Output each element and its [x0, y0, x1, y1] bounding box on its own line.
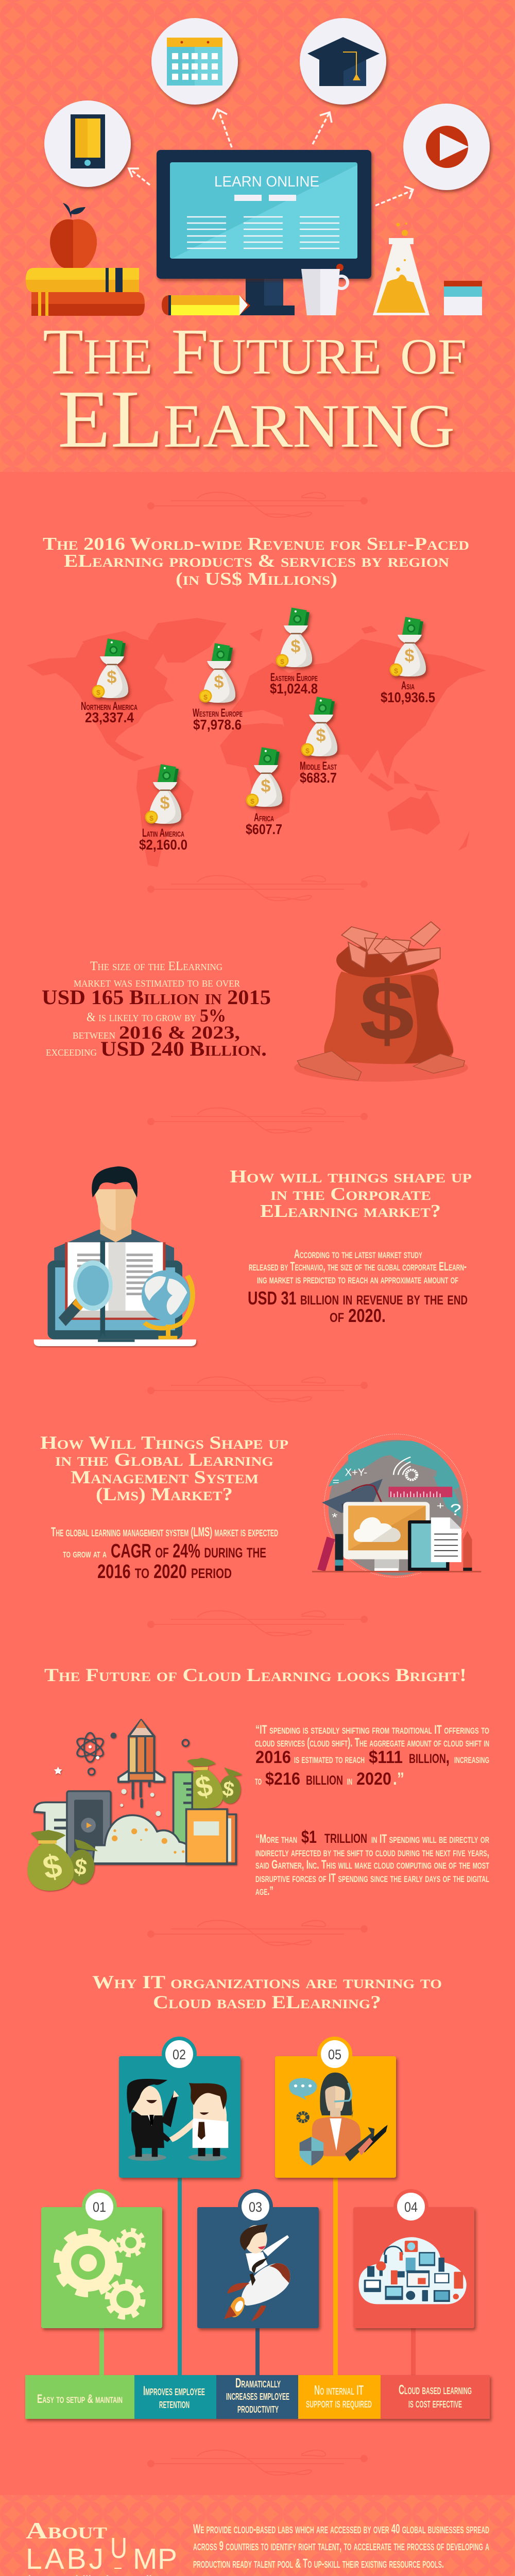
benefit 2 — [134, 2375, 216, 2419]
region: Middle East: $ — [305, 747, 310, 755]
quote: cloud shift: to — [255, 1774, 262, 1788]
benefit 5: is cost effective — [408, 2396, 462, 2411]
body text: 2016 to 2020 period — [97, 1561, 232, 1583]
logo: labjump: MP — [133, 2543, 177, 2575]
money bags left — [68, 1850, 94, 1884]
region: Africa: $ — [261, 776, 271, 796]
market size text: exceeding — [46, 1045, 97, 1059]
heading: ELearning market? — [260, 1201, 441, 1221]
quote: one trillion: $1 — [301, 1827, 317, 1847]
region: Eastern Europe: Eastern Europe — [270, 671, 318, 684]
quote: cloud shift: $111 — [369, 1748, 403, 1767]
benefit 4: No internal IT — [314, 2382, 364, 2398]
heading: in the Global Learning — [55, 1449, 273, 1470]
pencil rocket — [118, 1720, 164, 1782]
region: Middle East: Middle East — [300, 759, 337, 772]
book — [227, 1815, 236, 1864]
region: Africa: $ — [250, 797, 254, 805]
body text: to grow at a — [63, 1547, 107, 1560]
quote: one trillion — [255, 1826, 489, 1898]
math symbols: = — [332, 1477, 339, 1487]
learning devices illustration — [312, 1434, 481, 1577]
small box — [444, 281, 482, 315]
money bags right — [219, 1775, 241, 1804]
money sack illustration — [294, 922, 468, 1082]
region: Northern America: $ — [96, 688, 100, 697]
region: Latin America: $2,160.0 — [139, 837, 187, 853]
heading — [92, 1972, 442, 2012]
cloud learning illustration: $ — [72, 1854, 89, 1880]
benefit 3: productivity — [237, 2401, 279, 2416]
card 03: rocket man — [197, 2189, 319, 2328]
card 05: support — [275, 2037, 396, 2178]
money sack illustration: $ — [359, 964, 415, 1058]
quote: cloud shift: is estimated to reach — [294, 1752, 365, 1766]
icon: calendar in circle — [151, 18, 238, 105]
ruler — [174, 1772, 192, 1863]
benefit 4: support is required — [306, 2396, 372, 2411]
icon: graduation cap in circle — [300, 18, 386, 105]
title: The Future of — [43, 309, 467, 389]
region: Africa: $607.7 — [246, 821, 282, 837]
quote: one trillion: trillion — [324, 1826, 367, 1847]
math symbols: * — [332, 1511, 338, 1524]
region: Eastern Europe: $ — [291, 637, 301, 656]
cloud learning illustration: $ — [193, 1769, 215, 1804]
region: Latin America: $ — [149, 814, 153, 822]
market size text: market was estimated to be over — [74, 976, 240, 990]
quote: cloud shift: in — [347, 1774, 352, 1788]
benefit 2: retention — [159, 2397, 190, 2411]
card 02: teamwork — [119, 2037, 241, 2178]
heading — [43, 534, 469, 589]
region: Western Europe: $7,978.6 — [193, 717, 242, 733]
market size text: USD 240 Billion. — [100, 1037, 267, 1060]
heading: ELearning products & services by region — [64, 551, 449, 571]
footer — [0, 2495, 515, 2576]
heading: Why IT organizations are turning to — [92, 1972, 442, 1992]
market size text: USD 165 Billion in 2015 — [42, 986, 271, 1009]
title: ELearning — [58, 368, 455, 466]
pencil — [162, 295, 250, 315]
heading: (Lms) Market? — [96, 1484, 233, 1504]
about heading: About — [26, 2517, 107, 2544]
mug — [301, 264, 348, 315]
logo: labjump: LABJ — [26, 2543, 104, 2575]
market size text: 5% — [200, 1005, 226, 1026]
region: Asia: $10,936.5 — [381, 689, 435, 705]
flask — [373, 223, 430, 315]
heading: How will things shape up — [230, 1166, 472, 1187]
market size text: The size of the ELearning — [90, 959, 222, 973]
rocket man illustration — [224, 2224, 290, 2321]
heading: in the Corporate — [270, 1184, 431, 1204]
region: Northern America: Northern America — [81, 700, 138, 713]
math symbols: + — [437, 1500, 444, 1512]
cloud device icon — [359, 2237, 467, 2304]
section: why cloud based elearning — [25, 1972, 490, 2419]
region: Middle East: $ — [316, 726, 326, 745]
region: Africa: Africa — [254, 811, 274, 824]
monitor — [157, 150, 371, 315]
icon: play button in circle — [403, 104, 490, 190]
quote: one trillion: “More than — [255, 1832, 297, 1846]
heading — [40, 1432, 288, 1504]
heading: Cloud based ELearning? — [153, 1992, 381, 2012]
body text — [248, 1247, 468, 1326]
benefit 2: Improves employee — [143, 2384, 205, 2398]
region: Africa — [246, 747, 282, 837]
quote: cloud shift: $216 — [265, 1769, 300, 1789]
card 01: gears: 01 — [93, 2199, 106, 2215]
region: Middle East: $683.7 — [300, 770, 337, 786]
books and apple — [26, 203, 145, 316]
benefit 5 — [381, 2375, 490, 2419]
region: Eastern Europe — [270, 607, 318, 697]
heading: The 2016 World-wide Revenue for Self-Paced — [43, 534, 469, 554]
region: Western Europe: $ — [203, 693, 208, 701]
market size text — [42, 959, 271, 1060]
region: Asia: Asia — [401, 679, 415, 692]
benefit 1 — [25, 2375, 134, 2419]
section: market size — [42, 922, 468, 1082]
card 03: rocket man: 03 — [249, 2199, 262, 2215]
heading: Management System — [71, 1467, 259, 1487]
reader illustration — [34, 1166, 196, 1346]
about text — [193, 2522, 489, 2576]
card 01: gears — [41, 2189, 162, 2328]
heading: The Future of Cloud Learning looks Bright! — [44, 1665, 467, 1685]
region: Northern America: $ — [107, 668, 117, 687]
header pattern panel — [0, 0, 515, 472]
quote: cloud shift: billion — [306, 1768, 343, 1789]
card 05: support: 05 — [328, 2047, 341, 2062]
header banner — [0, 0, 515, 472]
tablet — [67, 1791, 111, 1863]
label: learn online: LEARN ONLINE — [214, 174, 319, 190]
scroll — [35, 1802, 67, 1863]
title — [43, 309, 467, 466]
logo: labjump — [26, 2532, 177, 2576]
quote: cloud shift: billion, — [409, 1746, 450, 1767]
cloud learning illustration: $ — [40, 1848, 65, 1887]
people shaking hands — [127, 2079, 228, 2161]
bottom benefits bar — [25, 2375, 490, 2419]
quote: cloud shift: 2016 — [255, 1748, 291, 1767]
heading: (in US$ Millions) — [176, 569, 337, 589]
benefit 3 — [216, 2375, 298, 2419]
quote: cloud shift: increasing — [454, 1752, 489, 1766]
heading: How Will Things Shape up — [40, 1432, 288, 1453]
region: Eastern Europe: $ — [280, 657, 284, 666]
section: LMS market — [40, 1432, 481, 1583]
quote: cloud shift: 2020 — [356, 1769, 391, 1789]
section: cloud learning — [27, 1665, 489, 1898]
body text: of 2020. — [330, 1305, 386, 1326]
quote: cloud shift: .” — [393, 1769, 404, 1789]
arrows from monitor — [129, 109, 413, 206]
cloud learning illustration: $ — [221, 1777, 236, 1802]
market size text: & is likely to grow by — [87, 1010, 196, 1024]
footer pattern panel — [0, 2495, 515, 2576]
benefit 3: Dramatically — [235, 2375, 281, 2391]
math symbols: ? — [450, 1501, 461, 1519]
cloud — [93, 1815, 206, 1863]
body text: The global learning management system (LMS) market is expected — [51, 1525, 278, 1539]
card 04: cloud of devices: 04 — [404, 2199, 418, 2215]
section: corporate elearning market — [34, 1166, 472, 1346]
card 02: teamwork: 02 — [173, 2047, 186, 2062]
benefit 1: Easy to setup & maintain — [37, 2392, 123, 2406]
icon: phone in circle — [44, 100, 131, 187]
connector lines — [99, 2174, 416, 2375]
math symbols — [332, 1466, 461, 1524]
region: Asia: $ — [405, 646, 415, 666]
support woman — [289, 2073, 388, 2166]
region: Latin America — [139, 764, 187, 853]
body text: CAGR of 24% during the — [111, 1540, 266, 1562]
math symbols: X+Y- — [345, 1466, 367, 1478]
region: Latin America: Latin America — [142, 826, 184, 839]
region: Asia: $ — [394, 667, 398, 675]
quote: cloud shift — [255, 1723, 489, 1789]
region: Latin America: $ — [160, 793, 170, 813]
region: Eastern Europe: $1,024.8 — [270, 681, 318, 697]
region: Asia — [381, 617, 435, 705]
region: Middle East — [300, 697, 337, 786]
atom — [75, 1733, 106, 1762]
market size text: 2016 & 2023, — [119, 1022, 240, 1043]
quote: one trillion: age.” — [255, 1884, 273, 1898]
body text: According to the latest market study — [294, 1247, 422, 1261]
body text — [51, 1525, 278, 1583]
world map — [27, 618, 486, 867]
region: Western Europe — [193, 643, 243, 733]
card 04: cloud of devices — [353, 2189, 474, 2328]
region: Northern America: 23,337.4 — [85, 709, 134, 725]
benefit 4 — [298, 2375, 381, 2419]
region: Western Europe: $ — [214, 672, 224, 692]
cloud learning illustration — [27, 1720, 242, 1891]
region: Northern America — [81, 638, 138, 725]
logo: labjump: U — [110, 2532, 127, 2565]
heading — [230, 1166, 472, 1221]
benefit 3: increases employee — [226, 2388, 289, 2403]
section: world revenue map — [27, 534, 486, 867]
market size text: between — [73, 1028, 115, 1042]
gears icon — [57, 2230, 143, 2317]
region: Western Europe: Western Europe — [193, 706, 243, 719]
